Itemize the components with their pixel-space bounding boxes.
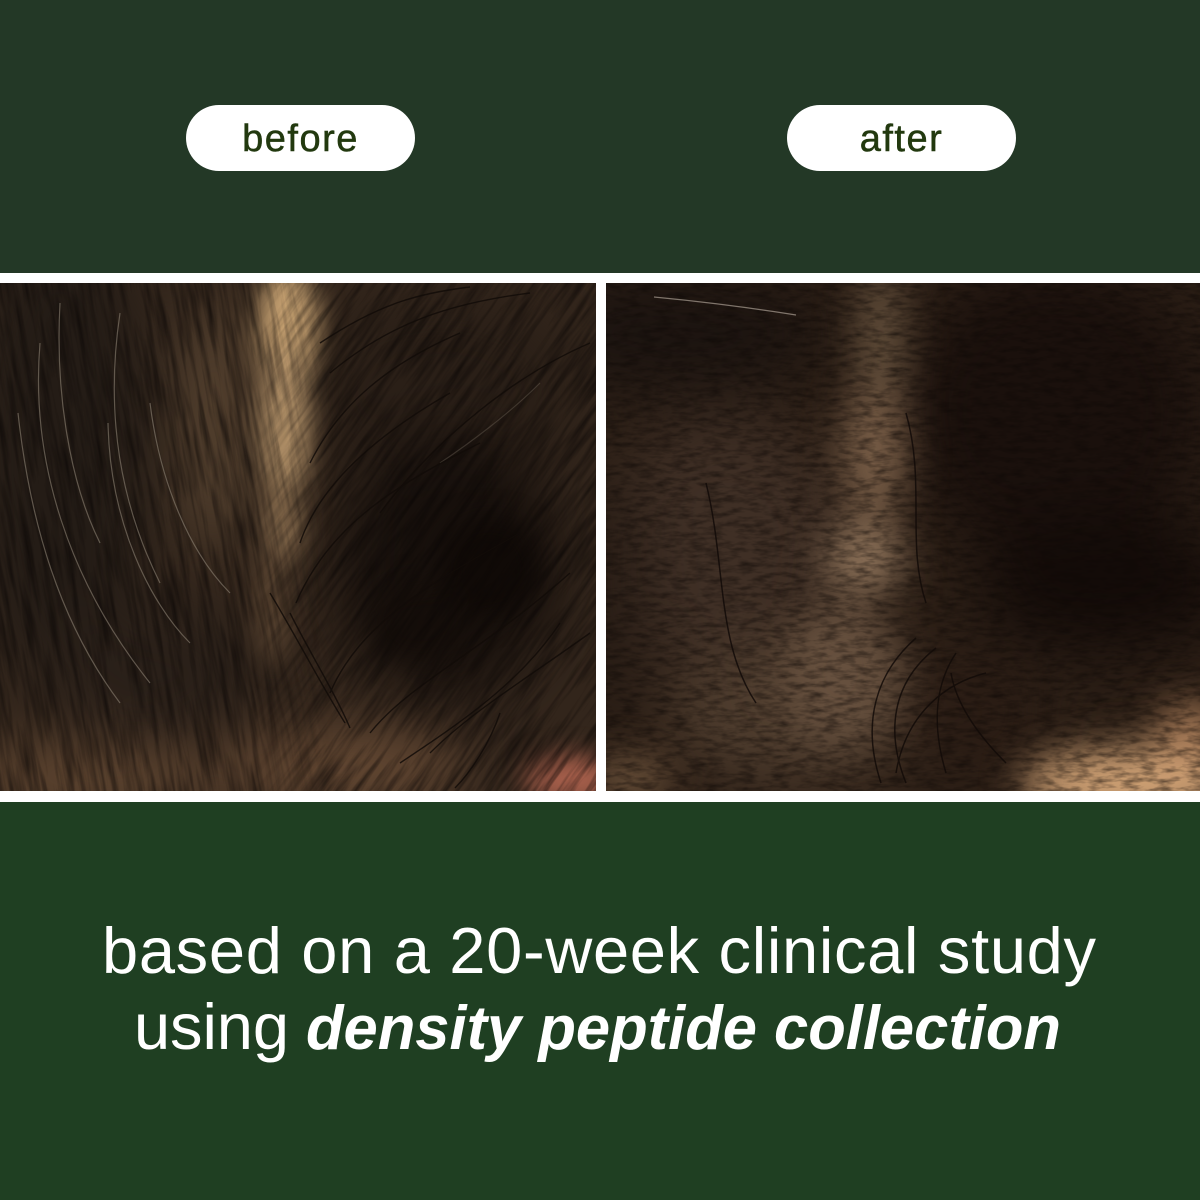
label pill: before: before — [242, 118, 359, 160]
label pill: after — [787, 105, 1016, 171]
caption text: using — [134, 990, 289, 1063]
photo: before scalp — [0, 283, 914, 791]
label pill: after: after — [860, 118, 943, 160]
panel: top header band — [0, 0, 1200, 273]
caption text: based on a 20-week clinical study — [102, 914, 1096, 987]
caption text — [102, 914, 1096, 1063]
photo: after scalp — [606, 283, 1200, 791]
panel: bottom caption band — [0, 802, 1200, 1200]
caption text: density peptide collection — [306, 994, 1061, 1063]
label pill: before — [186, 105, 415, 171]
